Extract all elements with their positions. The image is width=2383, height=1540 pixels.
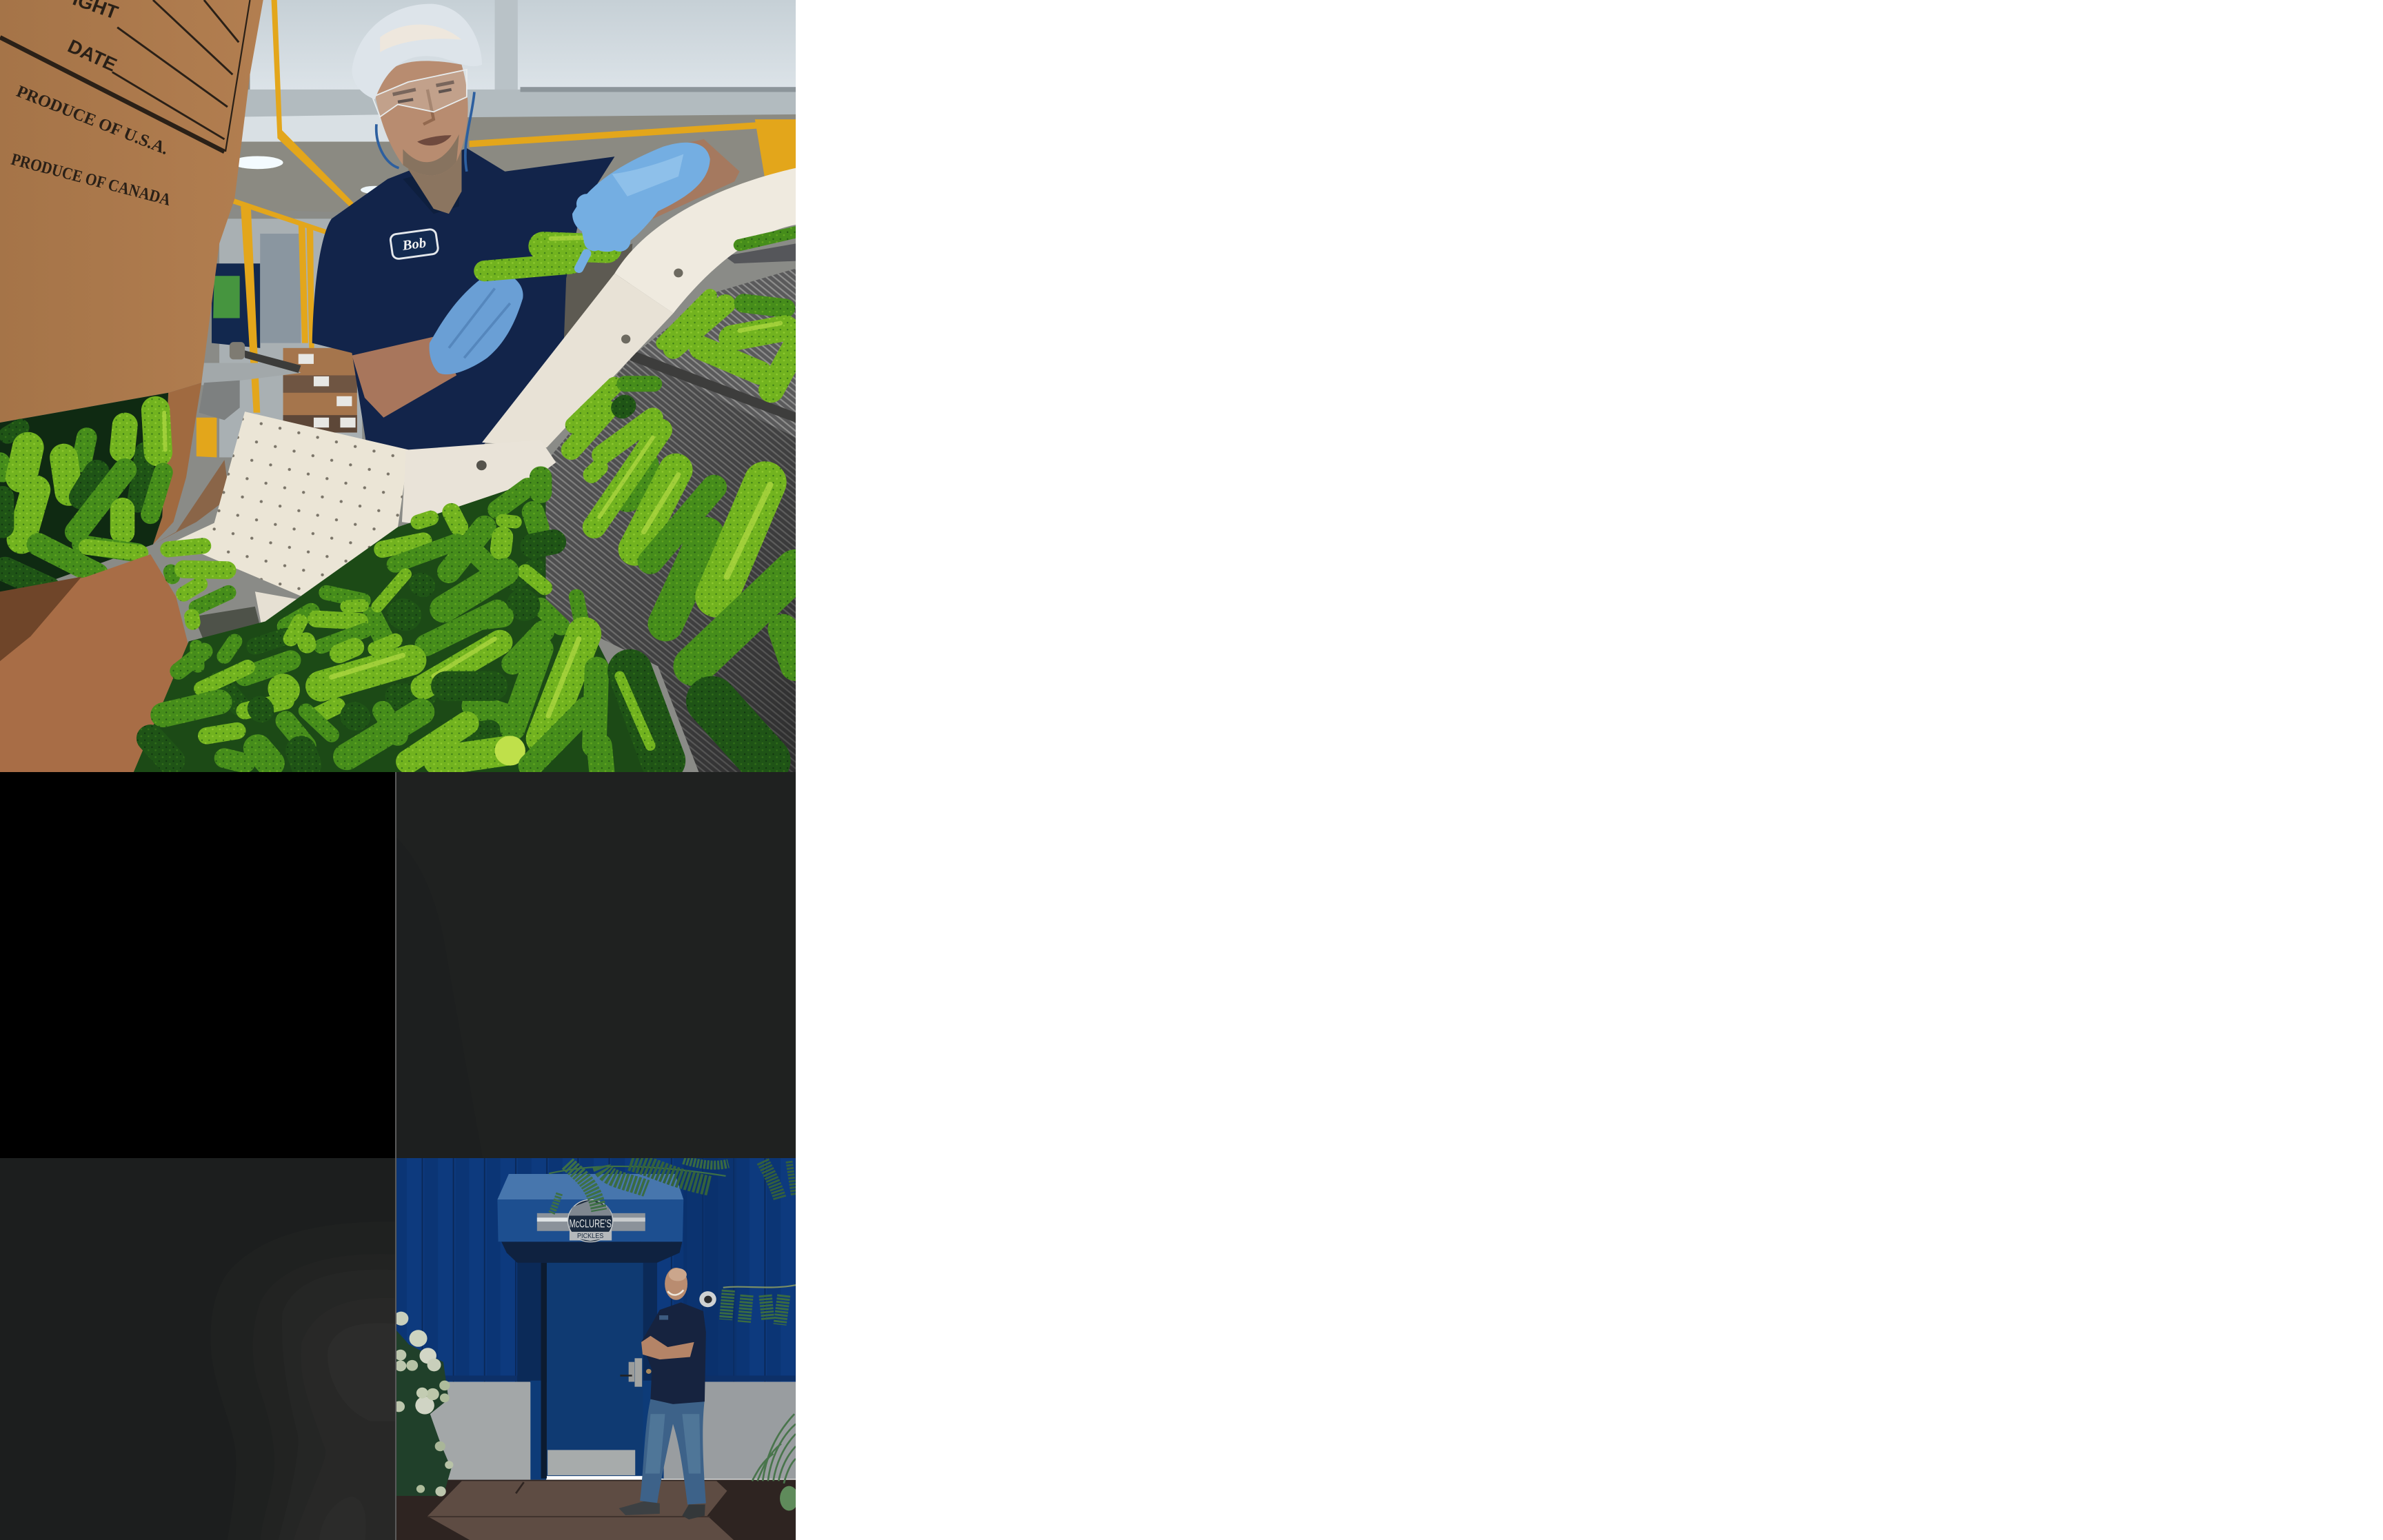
sign name: McCLURE'S <box>570 1217 612 1230</box>
box label produce of usa: PRODUCE OF U.S.A. <box>14 82 171 159</box>
glasses cords <box>376 92 474 172</box>
photo: worker inspecting pickles on conveyor <box>0 0 796 772</box>
panel: black square <box>0 772 395 1158</box>
yellow safety railings <box>197 0 796 457</box>
pickles climbing conveyor <box>572 384 796 760</box>
worker neck <box>408 149 461 214</box>
man jeans <box>640 1399 706 1505</box>
hairnet <box>352 4 482 99</box>
ground <box>396 1480 796 1540</box>
name patch <box>659 1315 668 1320</box>
sign stripes <box>537 1213 645 1231</box>
factory background <box>0 0 796 772</box>
safety glasses <box>372 70 467 116</box>
worker arm raised <box>653 139 740 219</box>
man head <box>665 1268 687 1300</box>
man crossed arms <box>641 1336 694 1359</box>
ornamental grass <box>752 1414 798 1511</box>
sign pickles: PICKLES <box>577 1233 603 1240</box>
panel: dark grey square top right <box>396 772 796 1158</box>
perforated white panel <box>174 412 556 641</box>
pickles spilling from box <box>168 546 228 622</box>
white conveyor guide <box>482 168 796 447</box>
cardboard box upper <box>0 0 263 545</box>
box label produce of canada: PRODUCE OF CANADA <box>9 150 172 210</box>
upper blue glove <box>572 143 710 268</box>
pickle pile on conveyor <box>134 477 663 772</box>
lower blue glove <box>430 272 523 374</box>
entrance awning <box>497 1174 683 1263</box>
door and frame <box>517 1250 664 1480</box>
panel: dark grey square with soft glow <box>0 1158 395 1540</box>
man shirt <box>641 1302 706 1404</box>
sign roundel <box>568 1199 613 1242</box>
picked pickle <box>485 238 607 271</box>
filler pickles behind pile <box>285 611 311 627</box>
security camera <box>699 1291 716 1307</box>
worker shirt <box>312 148 614 450</box>
pickles on upper belt <box>663 232 796 390</box>
cardboard box lower <box>0 460 230 772</box>
man standing <box>619 1268 706 1519</box>
grey plinth <box>396 1381 796 1480</box>
man shoes <box>619 1501 660 1515</box>
divider line between panels <box>395 772 396 1540</box>
conveyor belts <box>546 243 796 772</box>
hydrangea bush <box>393 1312 453 1497</box>
box opening with pickles <box>0 393 168 599</box>
worker forearm <box>352 336 456 418</box>
badge name: Bob <box>401 236 427 254</box>
worker <box>312 4 740 450</box>
name badge <box>390 229 439 259</box>
blue metal wall <box>396 1158 796 1383</box>
hanging branches <box>549 1160 796 1325</box>
photo: owner in front of McClure's Pickles door <box>396 1158 796 1540</box>
box form lines <box>0 0 250 152</box>
stacked boxes and metal table <box>199 342 357 432</box>
worker face <box>375 61 468 176</box>
box label date: DATE <box>65 35 120 76</box>
